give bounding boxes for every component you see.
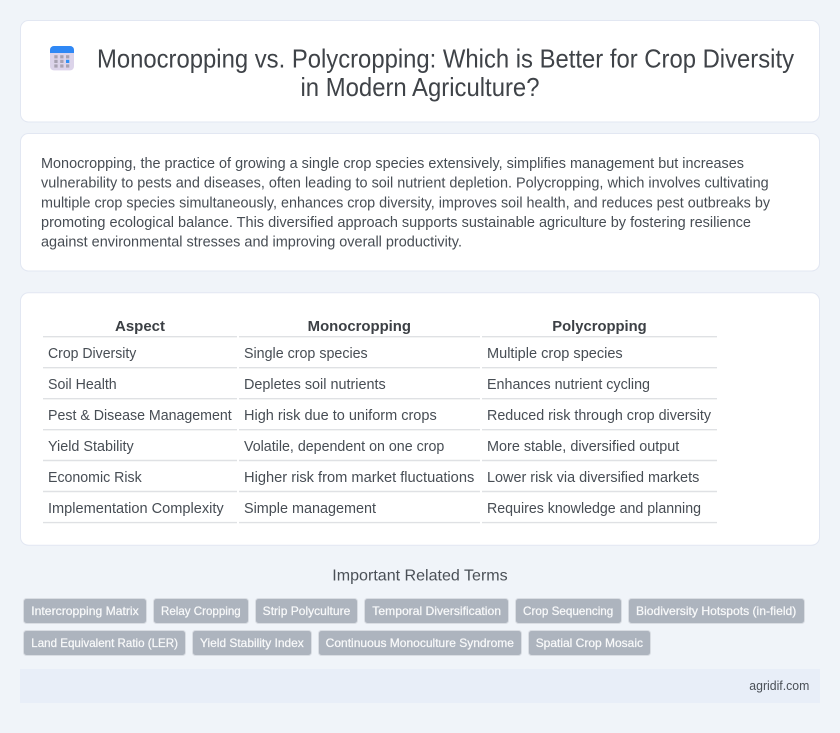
table row: yield stability — [43, 439, 717, 460]
icon: calendar — [50, 46, 74, 70]
title — [97, 46, 794, 102]
panel: related term tags — [24, 598, 804, 656]
table header row — [43, 319, 717, 337]
table row: implementation complexity: Simple management — [244, 501, 376, 517]
table header row: Monocropping — [308, 319, 411, 335]
tag: yield stability index — [192, 630, 312, 656]
tag: spatial crop mosaic: Spatial Crop Mosaic — [536, 636, 643, 650]
tag: yield stability index: Yield Stability Index — [200, 636, 304, 650]
tag: biodiversity hotspots: Biodiversity Hotspots (in-field) — [636, 604, 796, 618]
table row: soil health: Soil Health — [48, 377, 117, 393]
footer: agridif.com — [749, 678, 809, 693]
title: in Modern Agriculture? — [300, 74, 540, 102]
tag: temporal diversification: Temporal Diversification — [372, 604, 501, 618]
text block: summary — [41, 156, 771, 250]
tag: relay cropping — [154, 598, 248, 624]
table row: pest and disease management — [43, 408, 717, 430]
table row: crop diversity: Multiple crop species — [487, 346, 623, 362]
table row: pest and disease management: High risk due to uniform crops — [244, 408, 437, 424]
footer — [20, 669, 820, 703]
table row: soil health — [43, 377, 717, 399]
tag: crop sequencing: Crop Sequencing — [523, 604, 613, 618]
tag: temporal diversification — [364, 598, 508, 624]
table row: economic risk: Economic Risk — [48, 470, 142, 486]
table header row: Aspect — [115, 319, 165, 335]
table row: implementation complexity: Implementation Complexity — [48, 501, 225, 517]
table row: crop diversity: Single crop species — [244, 346, 368, 362]
panel: summary paragraph — [20, 134, 820, 271]
tag: intercropping matrix — [24, 598, 146, 624]
title: Monocropping vs. Polycropping: Which is Better for Crop Diversity — [97, 46, 794, 74]
heading: important related terms: Important Related Terms — [332, 568, 508, 585]
panel: comparison table — [20, 293, 820, 545]
table row: economic risk: Lower risk via diversified markets — [487, 470, 699, 486]
text block: summary: against environmental stresses and improving overall productivity. — [41, 234, 462, 250]
tag: relay cropping: Relay Cropping — [161, 604, 241, 618]
table row: soil health: Enhances nutrient cycling — [487, 377, 650, 393]
tag: continuous monoculture syndrome: Continuous Monoculture Syndrome — [326, 636, 514, 650]
tag: spatial crop mosaic — [528, 630, 650, 656]
table header row: Polycropping — [552, 319, 647, 335]
text block: summary: Monocropping, the practice of growing a single crop species extensively, simplifies management but increases — [41, 156, 744, 172]
tag: land equivalent ratio — [24, 630, 186, 656]
tag: intercropping matrix: Intercropping Matrix — [31, 604, 139, 618]
table row: yield stability: Yield Stability — [48, 439, 134, 455]
tag: crop sequencing — [516, 598, 622, 624]
table row: implementation complexity — [43, 501, 717, 523]
table row: economic risk — [43, 470, 717, 492]
text block: summary: promoting ecological balance. This diversified approach supports sustainable agriculture by fostering resilience — [41, 215, 751, 231]
table row: economic risk: Higher risk from market fluctuations — [244, 470, 474, 486]
tag: strip polyculture — [256, 598, 358, 624]
table row: crop diversity: Crop Diversity — [48, 346, 137, 362]
table row: pest and disease management: Pest & Disease Management — [48, 408, 232, 424]
table row: implementation complexity: Requires knowledge and planning — [487, 501, 701, 517]
tag: land equivalent ratio: Land Equivalent Ratio (LER) — [31, 636, 178, 650]
table row: crop diversity — [43, 346, 717, 368]
tag: biodiversity hotspots — [628, 598, 804, 624]
table row: pest and disease management: Reduced risk through crop diversity — [487, 408, 712, 424]
text block: summary: multiple crop species simultaneously, enhances crop diversity, improves soil health, and reduces pest outbreaks by — [41, 196, 771, 212]
tag: continuous monoculture syndrome — [318, 630, 522, 656]
table row: yield stability: More stable, diversified output — [487, 439, 679, 455]
panel: title header — [20, 20, 820, 122]
table row: soil health: Depletes soil nutrients — [244, 377, 386, 393]
text block: summary: vulnerability to pests and diseases, often leading to soil nutrient depletion. Polycropping, which involves cultivating — [41, 176, 769, 192]
table row: yield stability: Volatile, dependent on one crop — [244, 439, 444, 455]
tag: strip polyculture: Strip Polyculture — [263, 604, 351, 618]
